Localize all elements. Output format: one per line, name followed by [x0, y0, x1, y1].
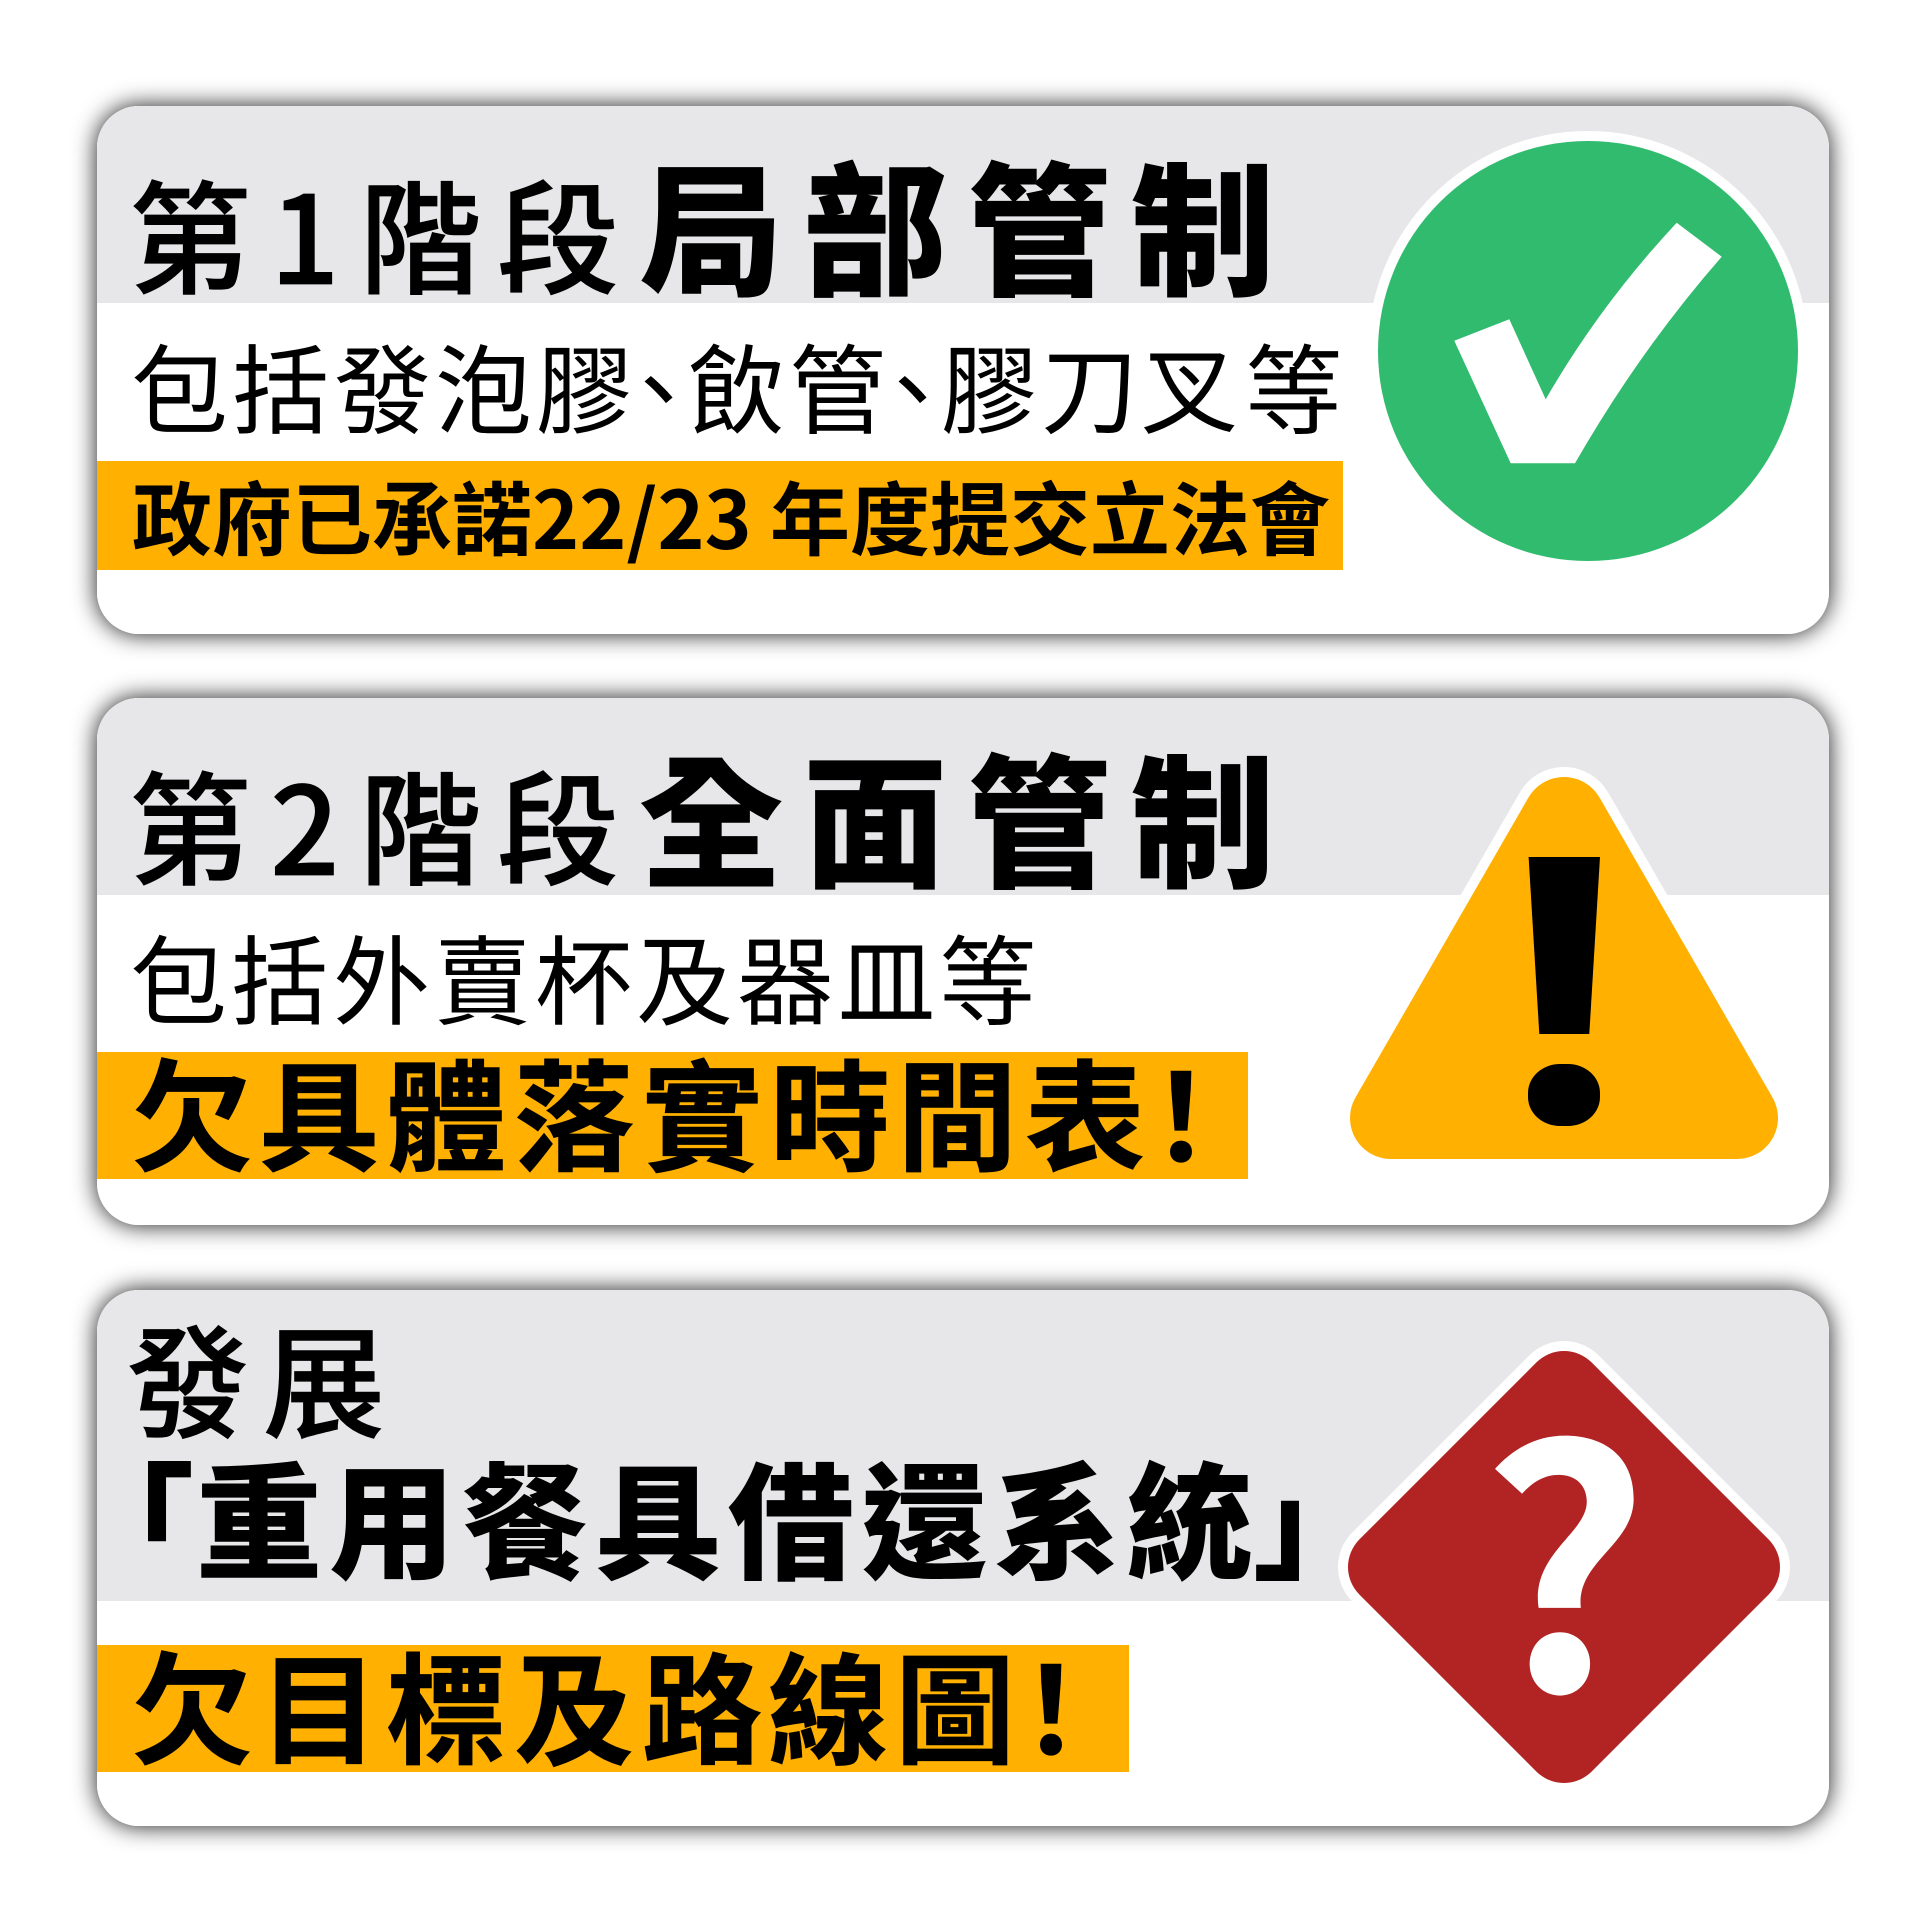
- stage 2 heading: 第2階段: [129, 734, 619, 911]
- stage 1 heading: [129, 118, 1275, 326]
- stage 3 heading: 「重用餐具借還系統」: [68, 1424, 1379, 1606]
- panel: stage 1: [97, 106, 1829, 634]
- stage 1 scope text: 包括發泡膠、飲管、膠刀叉等: [131, 313, 1342, 454]
- stage 3 heading: 發展: [127, 1287, 385, 1464]
- stage 1 heading: 第1階段: [129, 143, 619, 320]
- stage 3 orange status bar: 欠目標及路線圖！: [132, 1615, 1111, 1789]
- stage 2 scope text: 包括外賣杯及器皿等: [130, 904, 1036, 1045]
- stage 1 orange status bar: 政府已承諾: [132, 457, 532, 573]
- panel: stage 3 development: [68, 1287, 1829, 1826]
- stage 2 orange status bar: 欠具體落實時間表！: [132, 1022, 1241, 1196]
- stage 1 orange status bar: 22/23: [532, 457, 752, 573]
- stage 1 heading: 局部管制: [639, 118, 1275, 326]
- stage 3 heading: [68, 1287, 1379, 1606]
- icon: warning triangle: [1330, 818, 1800, 1180]
- icon: question diamond: ?: [1480, 1309, 1650, 1787]
- icon: question diamond: [1387, 1309, 1741, 1787]
- stage 2 heading: [129, 710, 1275, 918]
- stage 2 heading: 全面管制: [639, 710, 1275, 918]
- stage 1 orange status bar: 年度提交立法會: [770, 457, 1330, 573]
- icon: green check circle: [1368, 131, 1808, 571]
- panel: stage 2: [97, 698, 1829, 1225]
- stage 1 orange status bar: [97, 457, 1343, 573]
